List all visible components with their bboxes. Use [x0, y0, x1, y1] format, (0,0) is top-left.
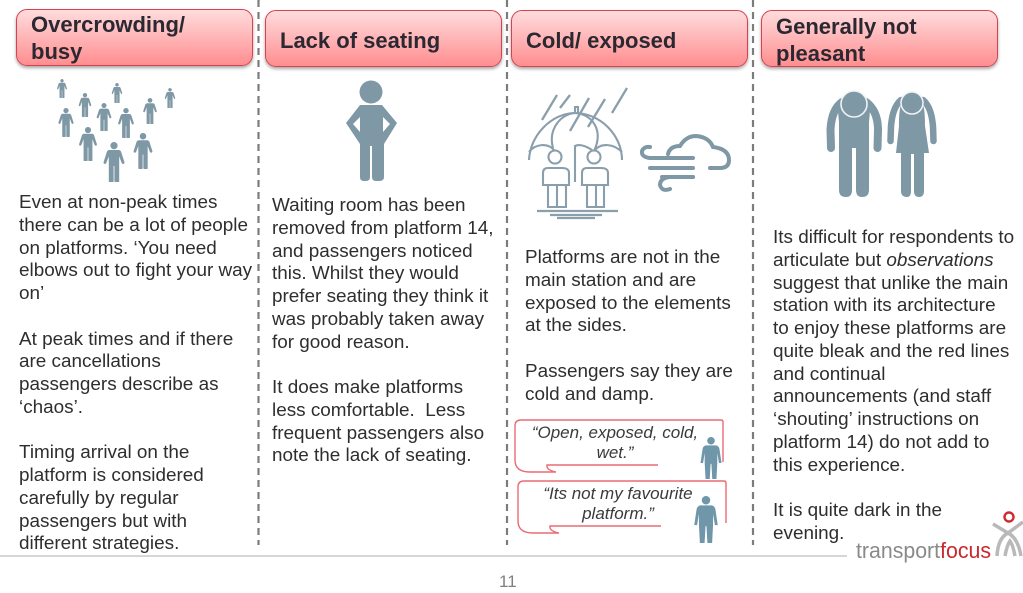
heading: generally not pleasant: Generally not pleasant: [776, 14, 917, 66]
quote bubble outline: open, exposed: [515, 420, 723, 472]
icon: dejected man and woman: [830, 91, 934, 197]
text: overcrowding: Even at non-peak times there can be a lot of people on platforms. ‘You need elbows out to fight your way on’ At peak times and if there are cancellations passengers describe as ‘chaos’. Timing arrival on the platform is considered carefully by regular passengers but with different strategies.: [19, 192, 252, 554]
heading: cold exposed: [511, 10, 748, 67]
text: generally not pleasant: Its difficult for respondents to articulate but observations suggest that unlike the main station with its architecture to enjoy these platforms are quite bleak and the red lines and continual announcements (and staff ‘shouting’ instructions on platform 14) do not add to this experience. It is quite dark in the evening.: [773, 227, 1014, 544]
page number: 11: [499, 572, 517, 591]
heading: overcrowding: Overcrowding/ busy: [31, 12, 185, 64]
logo mark: [993, 512, 1023, 556]
icon: wind and cloud: [642, 136, 729, 190]
icon: businessman two: [694, 496, 718, 543]
quote: not my favourite: “Its not my favourite platform.”: [543, 484, 693, 523]
quote: open, exposed: “Open, exposed, cold, wet.”: [532, 423, 698, 462]
heading: overcrowding: [16, 9, 253, 66]
heading: lack of seating: Lack of seating: [280, 28, 440, 53]
icon: crowd of people: [57, 79, 175, 182]
heading: generally not pleasant: [761, 10, 998, 67]
quote bubble outline: not my favourite: [518, 481, 726, 533]
text: cold exposed: Platforms are not in the main station and are exposed to the elements at the sides. Passengers say they are cold and damp.: [525, 247, 733, 404]
text: lack of seating: Waiting room has been removed from platform 14, and passengers noticed this. Whilst they would prefer seating they think it was probably taken away for good reason. It does make platforms less comfortable. Less frequent passengers also note the lack of seating.: [272, 195, 494, 466]
icon: businessman one: [700, 437, 722, 479]
icon: two people under umbrella in rain: [529, 88, 627, 218]
heading: cold exposed: Cold/ exposed: [526, 28, 676, 53]
icon: person with hands on hips: [346, 80, 397, 181]
heading: lack of seating: [265, 10, 502, 67]
logo wordmark: transportfocus: [856, 538, 991, 563]
